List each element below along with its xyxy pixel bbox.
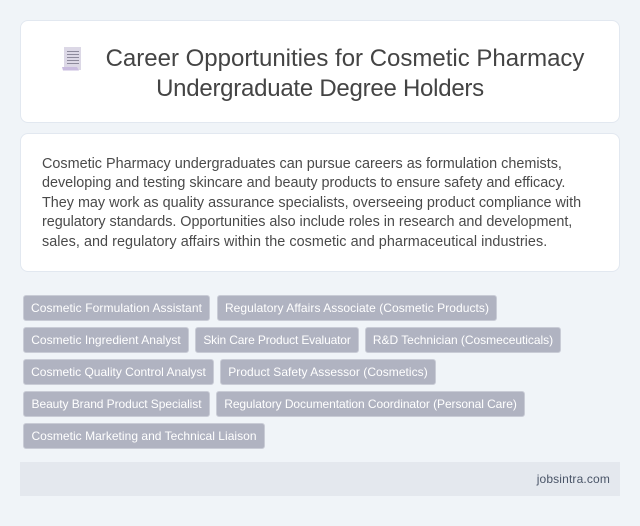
tag: Cosmetic Formulation Assistant [31,301,202,315]
footer bar [20,462,620,496]
tag [23,423,265,449]
tag: R&D Technician (Cosmeceuticals) [373,333,553,347]
description text: developing and testing skincare and beauty products to ensure safety and efficacy. [42,175,565,191]
tag: Product Safety Assessor (Cosmetics) [228,365,428,379]
icon: document [62,47,81,70]
tag: Skin Care Product Evaluator [203,333,351,347]
tag: Cosmetic Ingredient Analyst [31,333,181,347]
tag: Cosmetic Marketing and Technical Liaison [31,429,257,443]
tag: Regulatory Affairs Associate (Cosmetic Products) [225,301,489,315]
tag [195,327,359,353]
tag [23,295,210,321]
description text: sales, and regulatory affairs within the cosmetic and pharmaceutical industries. [42,234,547,250]
tag [23,391,210,417]
description text: Cosmetic Pharmacy undergraduates can pursue careers as formulation chemists, [42,156,562,172]
title: Career Opportunities for Cosmetic Pharmacy [106,45,584,72]
tag [23,359,214,385]
description text: They may work as quality assurance specialists, overseeing product compliance with [42,195,581,211]
tag [220,359,436,385]
tag [365,327,561,353]
footer source text: jobsintra.com [537,472,610,486]
title [106,45,584,102]
tag: Regulatory Documentation Coordinator (Personal Care) [224,397,517,411]
header panel [20,20,620,123]
tag: Cosmetic Quality Control Analyst [31,365,206,379]
tag [217,295,497,321]
description text: regulatory standards. Opportunities also include roles in research and development, [42,214,572,230]
title: Undergraduate Degree Holders [156,75,484,102]
tag: Beauty Brand Product Specialist [32,397,201,411]
description panel [20,133,620,272]
tag [23,327,189,353]
description text [42,156,581,250]
career tags [23,295,561,449]
tag [216,391,525,417]
